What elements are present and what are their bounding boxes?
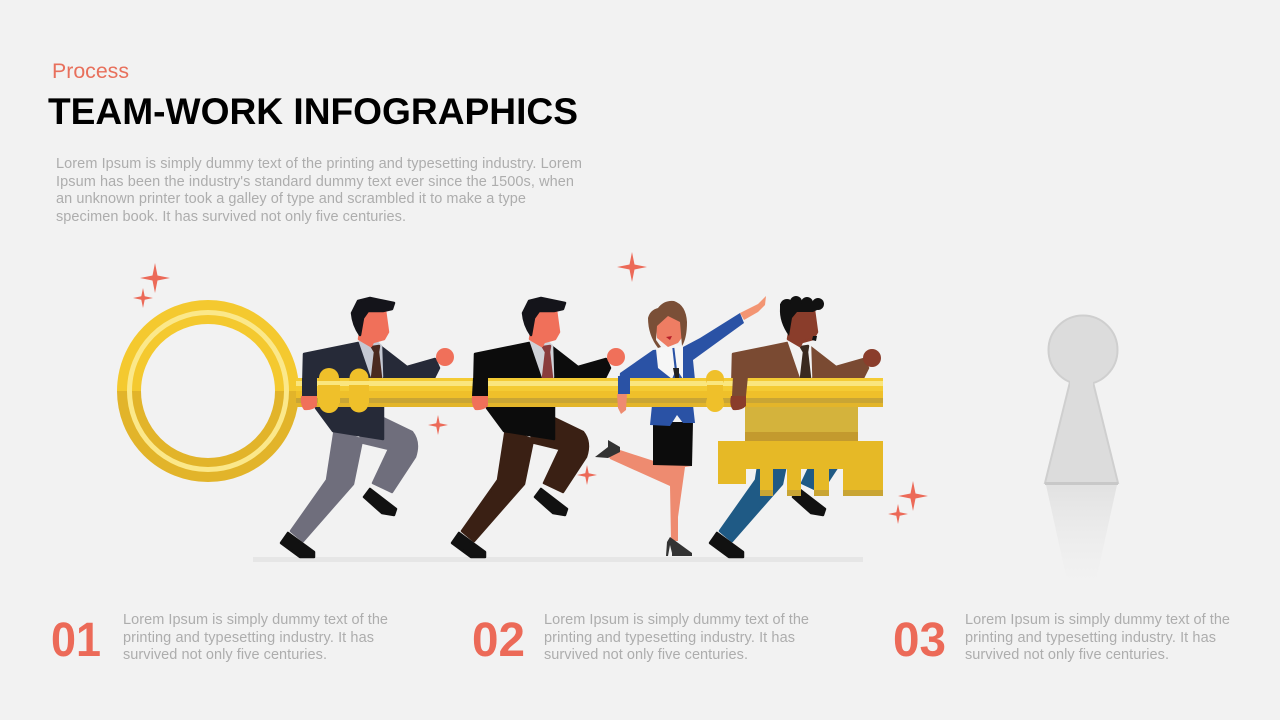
- step 01: printing and typesetting industry. It has: [123, 630, 374, 646]
- step 02: printing and typesetting industry. It has: [544, 630, 795, 646]
- person 3 woman body: [595, 296, 766, 556]
- intro paragraph: specimen book. It has survived not only five centuries.: [56, 209, 406, 225]
- step 03: 03: [893, 614, 946, 667]
- step 03: [893, 612, 1230, 667]
- step 02: survived not only five centuries.: [544, 647, 748, 663]
- key bit: [718, 407, 883, 496]
- intro paragraph: Lorem Ipsum is simply dummy text of the printing and typesetting industry. Lorem: [56, 156, 582, 172]
- section label: Process: [52, 60, 129, 83]
- step 01: survived not only five centuries.: [123, 647, 327, 663]
- step 01: [51, 612, 388, 667]
- person 2 body: [452, 298, 625, 557]
- step 02: [472, 612, 809, 667]
- sparkles: [133, 252, 928, 524]
- step 02: Lorem Ipsum is simply dummy text of the: [544, 612, 809, 628]
- title: TEAM-WORK INFOGRAPHICS: [48, 91, 578, 132]
- ground shadow: [253, 557, 863, 562]
- step 03: Lorem Ipsum is simply dummy text of the: [965, 612, 1230, 628]
- step 01: Lorem Ipsum is simply dummy text of the: [123, 612, 388, 628]
- person 1 body: [281, 298, 454, 557]
- step 03: printing and typesetting industry. It has: [965, 630, 1216, 646]
- person 4 body: [710, 296, 881, 557]
- intro paragraph: [56, 156, 582, 225]
- intro paragraph: an unknown printer took a galley of type and scrambled it to make a type: [56, 191, 526, 207]
- key knobs: [318, 368, 724, 413]
- step 03: survived not only five centuries.: [965, 647, 1169, 663]
- key bow ring: [129, 312, 287, 470]
- intro paragraph: Ipsum has been the industry's standard dummy text ever since the 1500s, when: [56, 174, 574, 190]
- step 01: 01: [51, 614, 101, 667]
- key shaft: [296, 378, 883, 407]
- keyhole: [1045, 316, 1118, 585]
- step 02: 02: [472, 614, 525, 667]
- gripping arms and hands: [301, 376, 748, 414]
